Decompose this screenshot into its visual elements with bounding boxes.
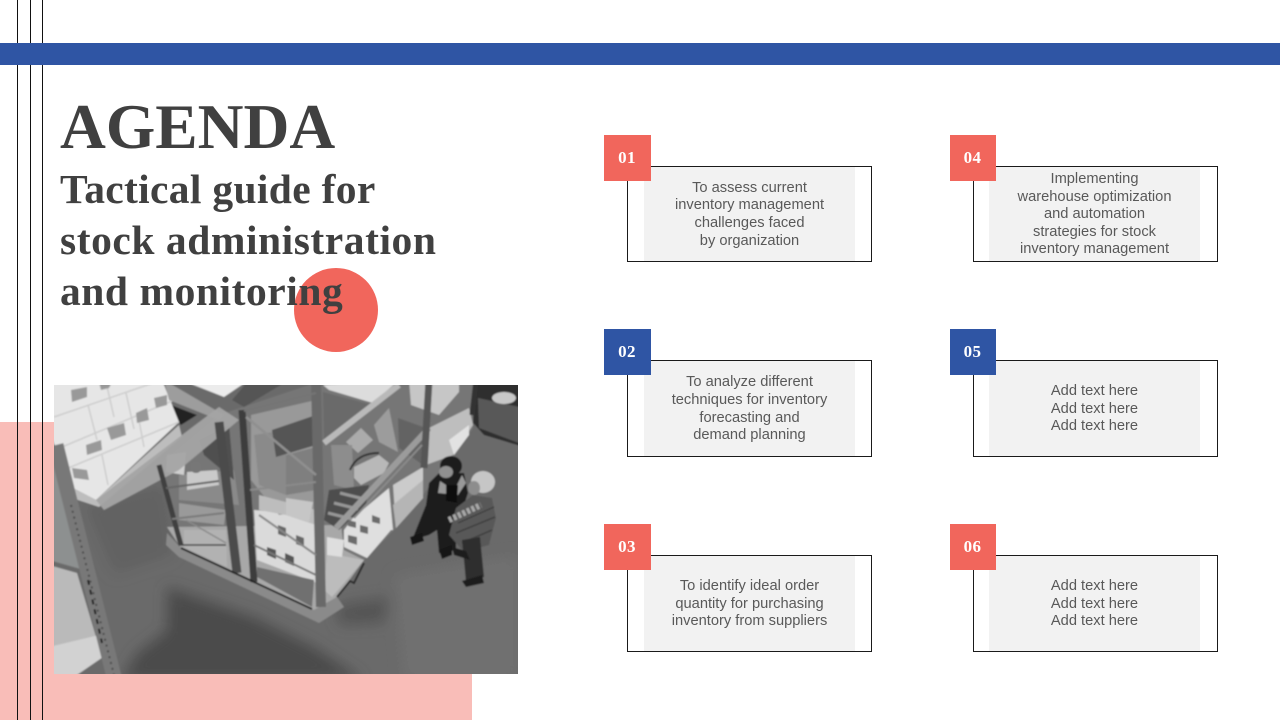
agenda item 04: [950, 135, 1218, 262]
agenda item 02: forecasting and: [699, 410, 800, 426]
rack body: [159, 380, 474, 610]
agenda item 04: Implementing: [1050, 171, 1138, 187]
agenda item 06: Add text here: [1051, 596, 1138, 612]
agenda item 02: 02: [618, 342, 636, 361]
top blue band: [0, 43, 1280, 65]
top white pallet and beams: [164, 380, 224, 420]
agenda item 05: Add text here: [1051, 383, 1138, 399]
agenda item 03: quantity for purchasing: [675, 596, 824, 612]
subtitle: and monitoring: [60, 268, 343, 314]
agenda item 04: strategies for stock: [1033, 224, 1156, 240]
pink background block: [0, 422, 472, 720]
left upright with holes: [56, 445, 114, 677]
agenda item 06: [950, 524, 1218, 652]
middle items: [179, 470, 239, 505]
agenda item 03: To identify ideal order: [680, 578, 819, 594]
grey boxes between uprights: [251, 400, 316, 515]
left lower stock: [49, 565, 99, 680]
vertical lines: [17, 0, 43, 720]
worker right: [449, 471, 496, 587]
agenda item 05: Add text here: [1051, 401, 1138, 417]
lower interior: [184, 530, 227, 567]
worker left: [410, 456, 468, 559]
agenda item 01: inventory management: [675, 197, 824, 213]
agenda item 02: To analyze different: [686, 374, 813, 390]
agenda item 02: [604, 329, 872, 457]
upper wood and boxes: [323, 392, 373, 442]
agenda item 06: Add text here: [1051, 613, 1138, 629]
agenda item 05: Add text here: [1051, 418, 1138, 434]
back right: [459, 380, 524, 447]
subtitle: stock administration: [60, 217, 436, 263]
floor: [34, 365, 538, 695]
agenda item 03: 03: [618, 537, 636, 556]
agenda item 01: by organization: [700, 233, 799, 249]
red circle: [294, 268, 378, 352]
agenda item 06: Add text here: [1051, 578, 1138, 594]
subtitle: Tactical guide for: [60, 166, 376, 212]
agenda item 01: 01: [618, 148, 636, 167]
agenda item 04: inventory management: [1020, 241, 1169, 257]
agenda item 04: warehouse optimization: [1018, 189, 1171, 205]
agenda item 01: challenges faced: [694, 215, 804, 231]
agenda item 06: 06: [964, 537, 981, 556]
agenda item 03: inventory from suppliers: [672, 613, 827, 629]
wood pallet steps: [324, 485, 369, 530]
curb: [166, 533, 344, 623]
base plate: [167, 525, 364, 610]
agenda item 02: techniques for inventory: [672, 392, 827, 408]
agenda item 04: 04: [964, 148, 981, 167]
top left white pallet: [49, 380, 179, 500]
photo: warehouse workers inspecting racks: [54, 385, 518, 674]
agenda item 01: [604, 135, 872, 262]
agenda item 04: and automation: [1044, 206, 1145, 222]
agenda item 05: [950, 329, 1218, 457]
white stacked stock: [344, 488, 393, 558]
agenda item 02: demand planning: [693, 427, 806, 443]
agenda item 05: 05: [964, 342, 981, 361]
agenda item 03: [604, 524, 872, 652]
agenda item 01: To assess current: [692, 180, 807, 196]
subtitle: [60, 166, 436, 314]
title: agenda: AGENDA: [60, 91, 335, 162]
